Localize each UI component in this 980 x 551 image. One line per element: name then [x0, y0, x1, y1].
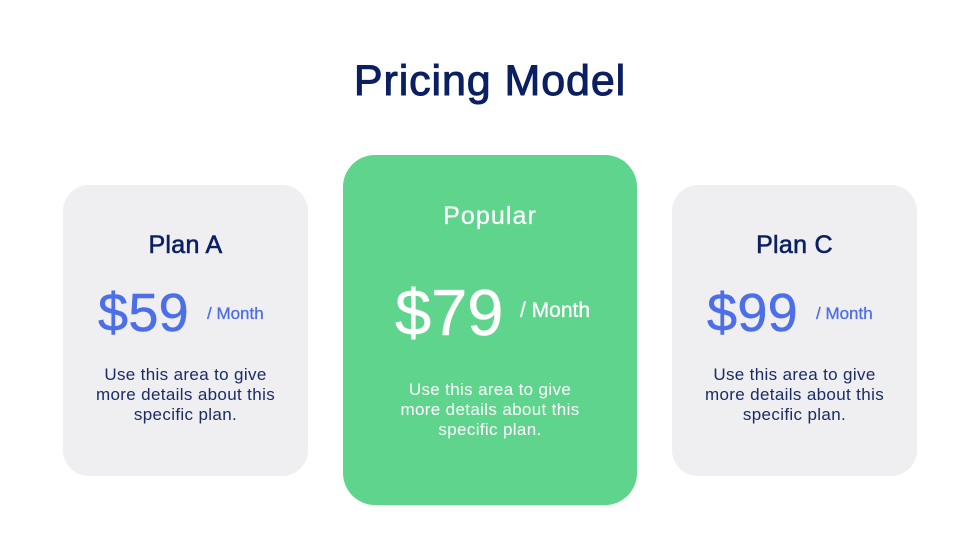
period: / Month: / Month — [207, 304, 264, 323]
plan details: Use this area to give — [104, 365, 267, 384]
period: / Month: / Month — [520, 299, 590, 322]
panel: Plan C — [672, 185, 917, 476]
plan name: Popular: Popular — [443, 202, 537, 230]
plan name: Plan A: Plan A — [148, 231, 223, 259]
plan details: Use this area to give — [713, 365, 876, 384]
plan details: more details about this — [96, 385, 275, 404]
plan name: Plan C: Plan C — [756, 231, 833, 259]
plan details — [96, 365, 275, 424]
price: $79: $79 — [395, 276, 503, 349]
price: $99: $99 — [707, 283, 798, 343]
plan details: specific plan. — [743, 405, 846, 424]
panel: Plan A — [63, 185, 308, 476]
plan details — [400, 380, 580, 439]
title: Pricing Model — [354, 57, 626, 105]
plan details: Use this area to give — [409, 380, 571, 399]
plan details: specific plan. — [134, 405, 237, 424]
plan details — [705, 365, 884, 424]
price: $59: $59 — [98, 283, 189, 343]
panel: Popular — [343, 155, 637, 505]
plan details: more details about this — [705, 385, 884, 404]
plan details: more details about this — [400, 400, 580, 419]
plan details: specific plan. — [438, 420, 542, 439]
period: / Month: / Month — [816, 304, 873, 323]
